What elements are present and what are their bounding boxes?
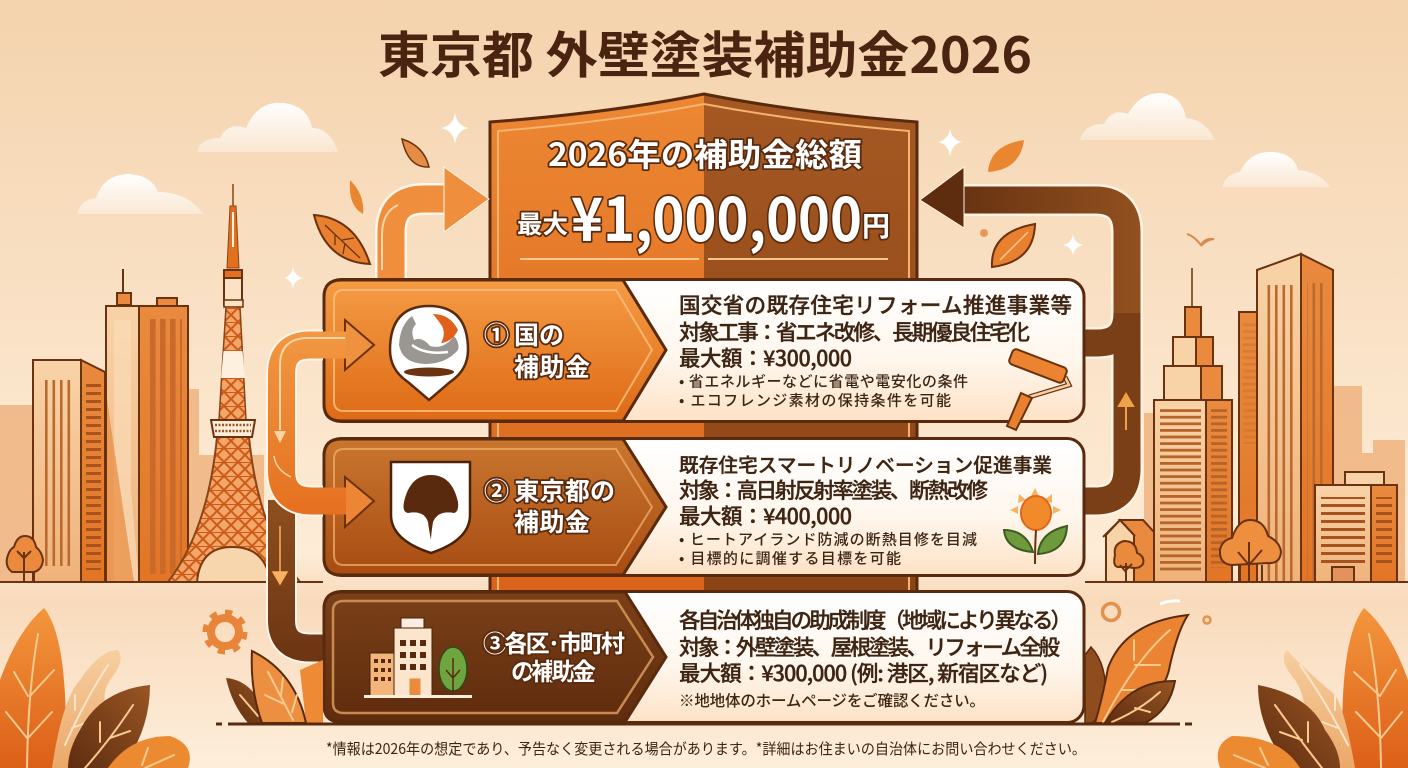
card 2 text: 対象：高日射反射率塗装、断熱改修 <box>679 474 988 505</box>
panel outline <box>490 94 917 592</box>
cloud top right <box>1080 93 1215 140</box>
card 1 label: 補助金 <box>514 348 590 384</box>
card 1 label <box>484 316 590 384</box>
icon: sun flower <box>1004 488 1067 564</box>
card 1 chevron <box>324 280 666 421</box>
building low right <box>1315 472 1397 582</box>
floating leaves <box>314 139 1035 267</box>
amount: 最大 <box>517 205 568 241</box>
arrow head 2 <box>345 477 374 527</box>
card 2 label <box>484 472 615 539</box>
icon: paint roller <box>1007 348 1069 430</box>
low leaf <box>108 736 190 768</box>
card 1 text: • 省エネルギーなどに省電や電安化の条件 <box>679 370 968 392</box>
distant silhouettes <box>1144 386 1405 582</box>
corner foliage left <box>0 608 190 768</box>
title: 東京都 外壁塗装補助金2026 <box>378 16 1032 88</box>
arrow: to total, right <box>920 167 1133 501</box>
panel inner trim <box>498 104 909 592</box>
panel divider <box>520 258 888 260</box>
card 2 text: • ヒートアイランド防減の断熱目修を目減 <box>679 528 977 550</box>
leaf orange <box>252 651 306 723</box>
building B <box>106 269 188 582</box>
dark leaf <box>1258 685 1340 768</box>
amount: 円 <box>862 205 890 245</box>
card 2 chevron <box>324 439 666 575</box>
card 3 chevron <box>324 592 666 722</box>
tree right <box>1220 520 1281 582</box>
Tokyo Tower <box>168 184 300 582</box>
icon: buildings <box>364 618 472 698</box>
card 1 text: 対象工事：省エネ改修、長期優良住宅化 <box>679 316 1030 347</box>
footnote: *情報は2026年の想定であり、予告なく変更される場合があります。*詳細はお住まいの自治体にお問い合わせください。 <box>326 738 1086 759</box>
corner foliage right <box>1218 608 1408 768</box>
card 3 text: 最大額：¥300,000 (例: 港区, 新宿区など) <box>679 657 1048 688</box>
card 2 label: ② 東京都の <box>484 472 615 508</box>
skyline left <box>0 184 323 582</box>
building tallest <box>1257 254 1333 582</box>
dark leaf <box>68 685 150 768</box>
arrow: upper left orange <box>274 338 346 501</box>
building tiered <box>1154 268 1232 582</box>
distant silhouettes <box>0 389 264 582</box>
leaf veined right <box>992 224 1035 267</box>
leaf small top <box>402 139 429 167</box>
card 2 <box>324 438 1084 576</box>
leaf dark <box>226 678 270 723</box>
card 2 text: 最大額：¥400,000 <box>679 500 852 531</box>
leaf right top <box>988 140 1024 172</box>
card 2 trim <box>334 449 652 565</box>
ground line left <box>0 581 323 583</box>
gear <box>206 613 244 651</box>
card 3 label: ③各区·市町村 <box>483 624 625 659</box>
card 2 label: 補助金 <box>514 503 590 539</box>
card 1 text <box>679 289 1072 410</box>
leaf slim <box>350 180 363 214</box>
building tall back <box>1239 312 1257 582</box>
bird <box>1187 234 1214 246</box>
card 3 <box>324 592 1084 722</box>
pale leaf <box>52 650 121 768</box>
card 3 body <box>324 592 1084 722</box>
card 2 text <box>679 449 1052 568</box>
card 2 text: 既存住宅スマートリノベーション促進事業 <box>679 449 1052 478</box>
center panel <box>490 94 917 592</box>
card 3 text: ※地地体のホームページをご確認ください。 <box>679 689 985 711</box>
arrow: to total, left <box>382 167 489 280</box>
foliage right of card 3 <box>1085 615 1188 723</box>
leaf orange back <box>300 660 323 723</box>
card 1 <box>324 280 1084 430</box>
leaf dark back <box>1085 647 1105 723</box>
panel right half <box>704 94 917 592</box>
tree <box>7 536 43 582</box>
panel heading: 2026年の補助金総額 <box>548 130 862 176</box>
card 3 label <box>483 624 625 687</box>
sparkles <box>284 113 1083 289</box>
icon: emblem <box>390 306 468 400</box>
card 3 text: 各自治体独自の助成制度（地域により異なる） <box>679 604 1072 635</box>
card 3 text: 対象：外壁塗装、屋根塗装、リフォーム全般 <box>679 631 1060 662</box>
foliage behind lower left of card 3 <box>226 651 323 723</box>
card 1 trim <box>334 290 652 411</box>
leaf big <box>1095 615 1188 723</box>
card 1 text: 最大額：¥300,000 <box>679 342 852 373</box>
panel left half <box>490 94 704 592</box>
card 3 trim <box>333 601 653 713</box>
cloud top left <box>197 103 338 152</box>
low leaf <box>1218 736 1300 768</box>
big leaf <box>1342 608 1408 768</box>
cloud left <box>77 174 203 214</box>
ground line bottom <box>216 722 1192 726</box>
leaf dark front <box>1105 681 1175 723</box>
card 2 text: • 目標的に調催する目標を可能 <box>679 548 901 568</box>
decorative rings <box>1102 601 1210 624</box>
card 2 body <box>324 438 1084 576</box>
card 1 text: 国交省の既存住宅リフォーム推進事業等 <box>679 289 1072 320</box>
big leaf <box>0 608 66 768</box>
building A <box>33 360 105 582</box>
card 1 body <box>324 280 1084 422</box>
icon: shield <box>391 462 470 553</box>
arrow: lower left brown <box>273 500 335 648</box>
dot <box>980 229 988 237</box>
house <box>1103 520 1154 582</box>
clouds <box>77 93 1330 214</box>
amount: ¥1,000,000 <box>571 172 862 259</box>
pale leaf <box>1284 650 1355 768</box>
card 3 text <box>679 604 1072 711</box>
card 3 label: の補助金 <box>511 652 596 687</box>
ground line right <box>1085 581 1408 583</box>
cloud right <box>1222 152 1330 187</box>
arrow head 1 <box>345 320 374 370</box>
skyline right <box>1085 234 1408 582</box>
card 1 label: ① 国の <box>484 316 564 352</box>
card 1 text: • エコフレンジ素材の保持条件を可能 <box>679 390 951 410</box>
leaf veined left <box>314 215 370 264</box>
